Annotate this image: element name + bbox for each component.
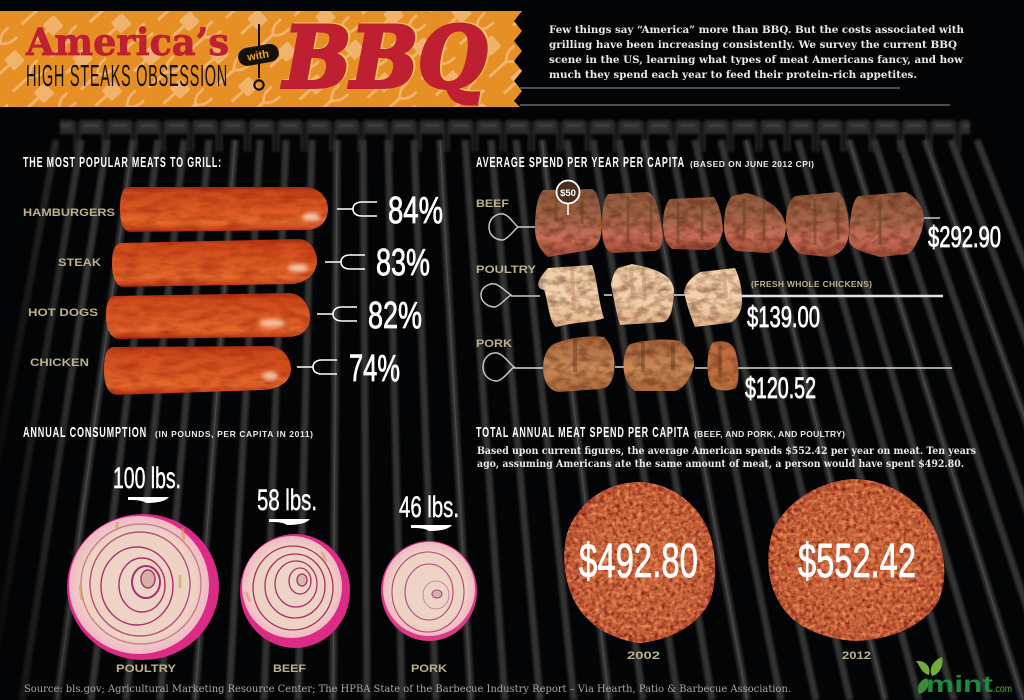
value: 58 lbs: 58 lbs. <box>257 484 317 517</box>
panel: annual consumption <box>23 424 477 675</box>
value: 82%: 82% <box>368 295 422 337</box>
label: poultry: POULTRY <box>476 264 537 276</box>
intro text: much they spend each year to feed their protein-rich appetites. <box>549 69 917 81</box>
marker: $50 scale pin: $50 <box>560 188 576 199</box>
logo: mint.com: .com <box>993 684 1012 695</box>
heading: AVERAGE SPEND PER YEAR PER CAPITA <box>476 154 685 171</box>
intro text <box>549 24 964 81</box>
title: BBQ shadow: BBQ <box>284 7 489 106</box>
onion: poultry <box>67 514 219 660</box>
intro text: grilling have been increasing consistently. We survey the current BBQ <box>549 39 957 51</box>
intro text: Few things say “America” more than BBQ. But the costs associated with <box>549 24 964 36</box>
intro text: scene in the US, learning what types of meat Americans fancy, and how <box>549 54 964 66</box>
icon: skewer with "with" tag <box>237 24 280 90</box>
paragraph <box>477 446 976 470</box>
heading: THE MOST POPULAR MEATS TO GRILL: <box>23 154 222 171</box>
heading note: (IN POUNDS, PER CAPITA IN 2011) <box>155 429 313 439</box>
logo: mint.com: mint <box>926 671 993 697</box>
label: 2002: 2002 <box>627 650 660 662</box>
hot dog bar: steak: STEAK <box>58 257 101 269</box>
marker: $50 scale pin <box>556 180 580 215</box>
patty: 2002 <box>564 482 715 643</box>
fork pointer: 74% <box>297 360 337 374</box>
hot dog bar: chicken: CHICKEN <box>30 357 89 369</box>
onion: beef <box>240 534 350 648</box>
skewer: poultry <box>481 264 943 327</box>
patty: 2012 <box>768 479 944 641</box>
label: pork: PORK <box>476 338 512 350</box>
icon: knife <box>411 525 452 531</box>
value: 46 lbs: 46 lbs. <box>399 491 459 524</box>
value: 2012 spend: $552.42 <box>798 535 916 588</box>
value: poultry spend: $139.00 <box>747 301 820 334</box>
value: 83%: 83% <box>376 242 430 284</box>
paragraph: ago, assuming Americans ate the same amount of meat, a person would have spent $492.80. <box>477 459 964 470</box>
icon: knife <box>128 497 169 503</box>
header banner: HIGH STEAKS OBSESSION <box>26 58 228 93</box>
label: poultry: POULTRY <box>116 663 177 675</box>
title: BBQ: BBQ <box>282 8 487 107</box>
source note: Source: bls.gov; Agricultural Marketing Resource Center; The HPBA State of the Barbecue Industry Report – Via Hearth, Patio & Barbecue Association. <box>24 684 791 695</box>
panel: total annual meat spend <box>476 424 976 662</box>
value: 2002 spend: $492.80 <box>579 535 698 588</box>
label: pork: PORK <box>411 663 447 675</box>
hot dog bar: hot dogs <box>28 293 310 339</box>
icon: knife <box>269 519 310 525</box>
value: pork spend: $120.52 <box>745 372 816 405</box>
header banner <box>0 7 522 107</box>
hot dog bar: hot dogs: HOT DOGS <box>28 307 98 319</box>
fork pointer: 82% <box>317 307 357 321</box>
heading: ANNUAL CONSUMPTION <box>23 424 147 441</box>
fork pointer: 83% <box>325 255 365 269</box>
heading: TOTAL ANNUAL MEAT SPEND PER CAPITA <box>476 424 690 441</box>
hot dog bar: hamburgers: HAMBURGERS <box>23 207 115 219</box>
panel: average spend <box>476 154 1001 405</box>
onion: pork <box>381 541 477 641</box>
hot dog bar: steak <box>58 239 317 287</box>
heading note: (BASED ON JUNE 2012 CPI) <box>690 159 814 169</box>
heading note: (BEEF, AND PORK, AND POULTRY) <box>694 429 845 439</box>
value: 100 lbs: 100 lbs. <box>113 462 181 495</box>
value: 74%: 74% <box>349 348 400 390</box>
title: America's: America’s <box>25 20 229 64</box>
paragraph: Based upon current figures, the average American spends $552.42 per year on meat. Ten years <box>477 446 976 457</box>
value: 84%: 84% <box>388 190 443 232</box>
note: fresh whole chickens: (FRESH WHOLE CHICKENS) <box>751 279 872 289</box>
icon: skewer with "with" tag: with <box>245 48 270 64</box>
logo: mint.com <box>916 657 1012 697</box>
skewer: pork <box>483 336 952 392</box>
hot dog bar: hamburgers <box>23 187 328 232</box>
label: 2012: 2012 <box>842 650 871 662</box>
fork pointer: 84% <box>337 202 377 216</box>
label: beef: BEEF <box>273 663 306 675</box>
hot dog bar: chicken <box>30 346 291 395</box>
panel: most popular meats <box>23 154 443 395</box>
label: beef: BEEF <box>476 198 509 210</box>
skewer: beef <box>489 189 940 257</box>
